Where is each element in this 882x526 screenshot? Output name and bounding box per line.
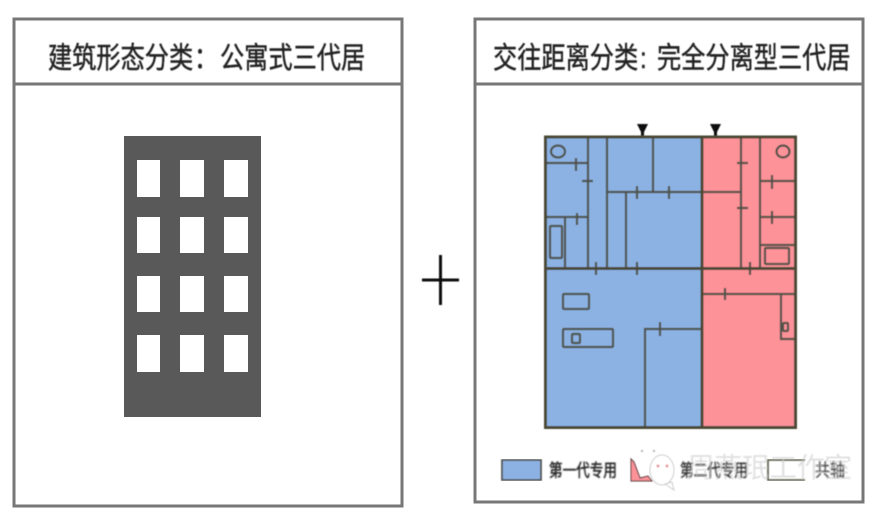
panel: building form classification (14, 19, 402, 506)
legend (502, 459, 845, 481)
heading: building form: ： (194, 42, 218, 75)
heading: interaction distance: 完全分离型三代居 (657, 42, 851, 75)
interior walls (545, 137, 795, 427)
outer and party walls (545, 137, 796, 428)
fixtures (551, 146, 565, 158)
watermark (641, 450, 852, 490)
icon: apartment building (124, 136, 261, 417)
legend: first generation (502, 460, 617, 481)
panel: interaction distance classification (475, 19, 863, 502)
heading: interaction distance: 交往距离分类 (493, 42, 638, 75)
legend: second generation: 第二代专用 (680, 461, 748, 481)
second generation area (702, 137, 795, 427)
legend: shared: 共轴 (815, 460, 845, 481)
legend: second generation (631, 459, 748, 481)
legend: shared (768, 460, 845, 481)
icon: chat bubble logo (641, 450, 674, 490)
watermark: 周燕珉工作室 (687, 452, 852, 483)
floor plan (545, 124, 796, 428)
icon: plus sign (422, 255, 459, 305)
door ticks (576, 158, 772, 336)
entrance markers (637, 124, 721, 137)
heading: building form: 建筑形态分类 (48, 42, 193, 75)
heading: building form: 公寓式三代居 (220, 42, 365, 75)
first generation area (546, 137, 702, 427)
heading: interaction distance: : (640, 42, 647, 75)
legend: first generation: 第一代专用 (549, 461, 617, 481)
